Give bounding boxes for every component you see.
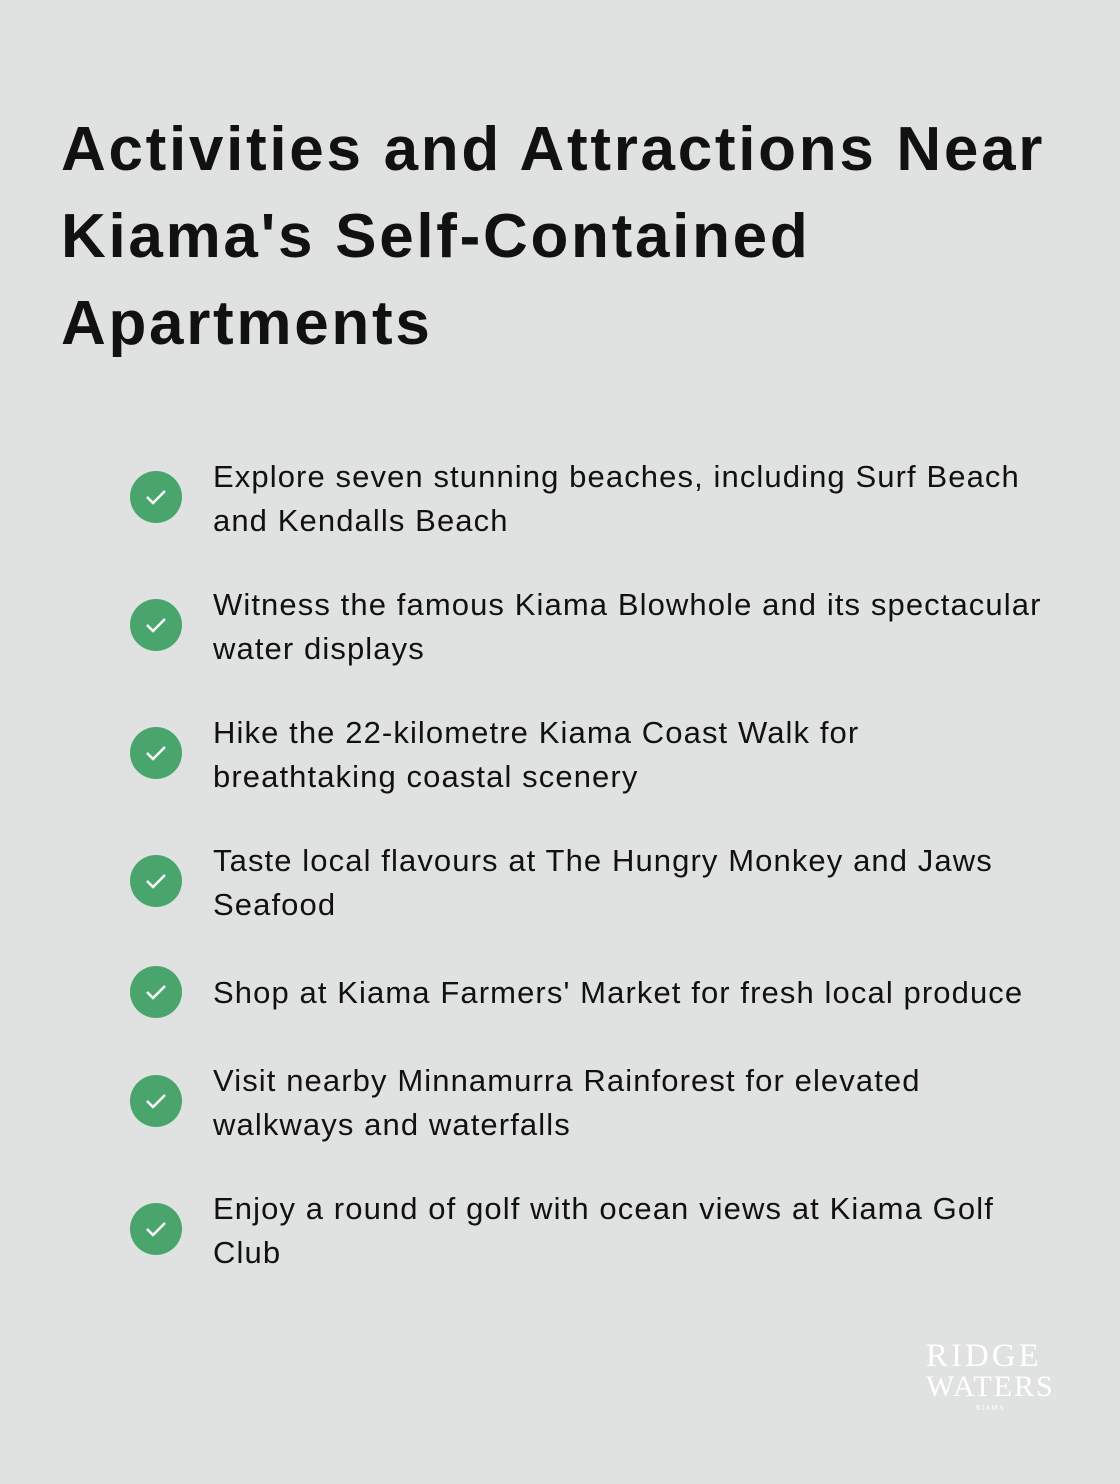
text 1: and Kendalls Beach: [213, 503, 509, 538]
list item 5: [130, 966, 1023, 1018]
text 4: Taste local flavours at The Hungry Monkey and Jaws: [213, 843, 993, 878]
text 7: Club: [213, 1235, 281, 1270]
text 1: [213, 459, 1020, 538]
icon: check: [130, 855, 182, 907]
title: Kiama's Self-Contained: [61, 202, 810, 271]
text 7: Enjoy a round of golf with ocean views at Kiama Golf: [213, 1191, 994, 1226]
list item 7: [130, 1191, 994, 1270]
text 2: [213, 587, 1042, 666]
icon: check: [130, 1075, 182, 1127]
list item 1: [130, 459, 1020, 538]
title: Apartments: [61, 289, 433, 358]
list item 6: [130, 1063, 921, 1142]
text 3: [213, 715, 859, 794]
text 6: walkways and waterfalls: [213, 1107, 571, 1142]
icon: check: [130, 471, 182, 523]
logo: KIAMA: [976, 1404, 1005, 1412]
text 2: water displays: [213, 631, 425, 666]
text 3: Hike the 22-kilometre Kiama Coast Walk for: [213, 715, 859, 750]
text 5: Shop at Kiama Farmers' Market for fresh local produce: [213, 975, 1023, 1010]
logo: RIDGE: [926, 1338, 1042, 1374]
text 6: Visit nearby Minnamurra Rainforest for elevated: [213, 1063, 921, 1098]
text 7: [213, 1191, 994, 1270]
title: Activities and Attractions Near: [61, 115, 1045, 184]
logo: [926, 1338, 1055, 1412]
icon: check: [130, 599, 182, 651]
icon: check: [130, 966, 182, 1018]
text 4: Seafood: [213, 887, 336, 922]
icon: check: [130, 1203, 182, 1255]
title: [61, 115, 1045, 358]
list item 3: [130, 715, 859, 794]
text 2: Witness the famous Kiama Blowhole and its spectacular: [213, 587, 1042, 622]
icon: check: [130, 727, 182, 779]
text 3: breathtaking coastal scenery: [213, 759, 638, 794]
list item 4: [130, 843, 993, 922]
list item 2: [130, 587, 1042, 666]
text 4: [213, 843, 993, 922]
text 1: Explore seven stunning beaches, including Surf Beach: [213, 459, 1020, 494]
logo: WATERS: [926, 1370, 1055, 1403]
text 6: [213, 1063, 921, 1142]
